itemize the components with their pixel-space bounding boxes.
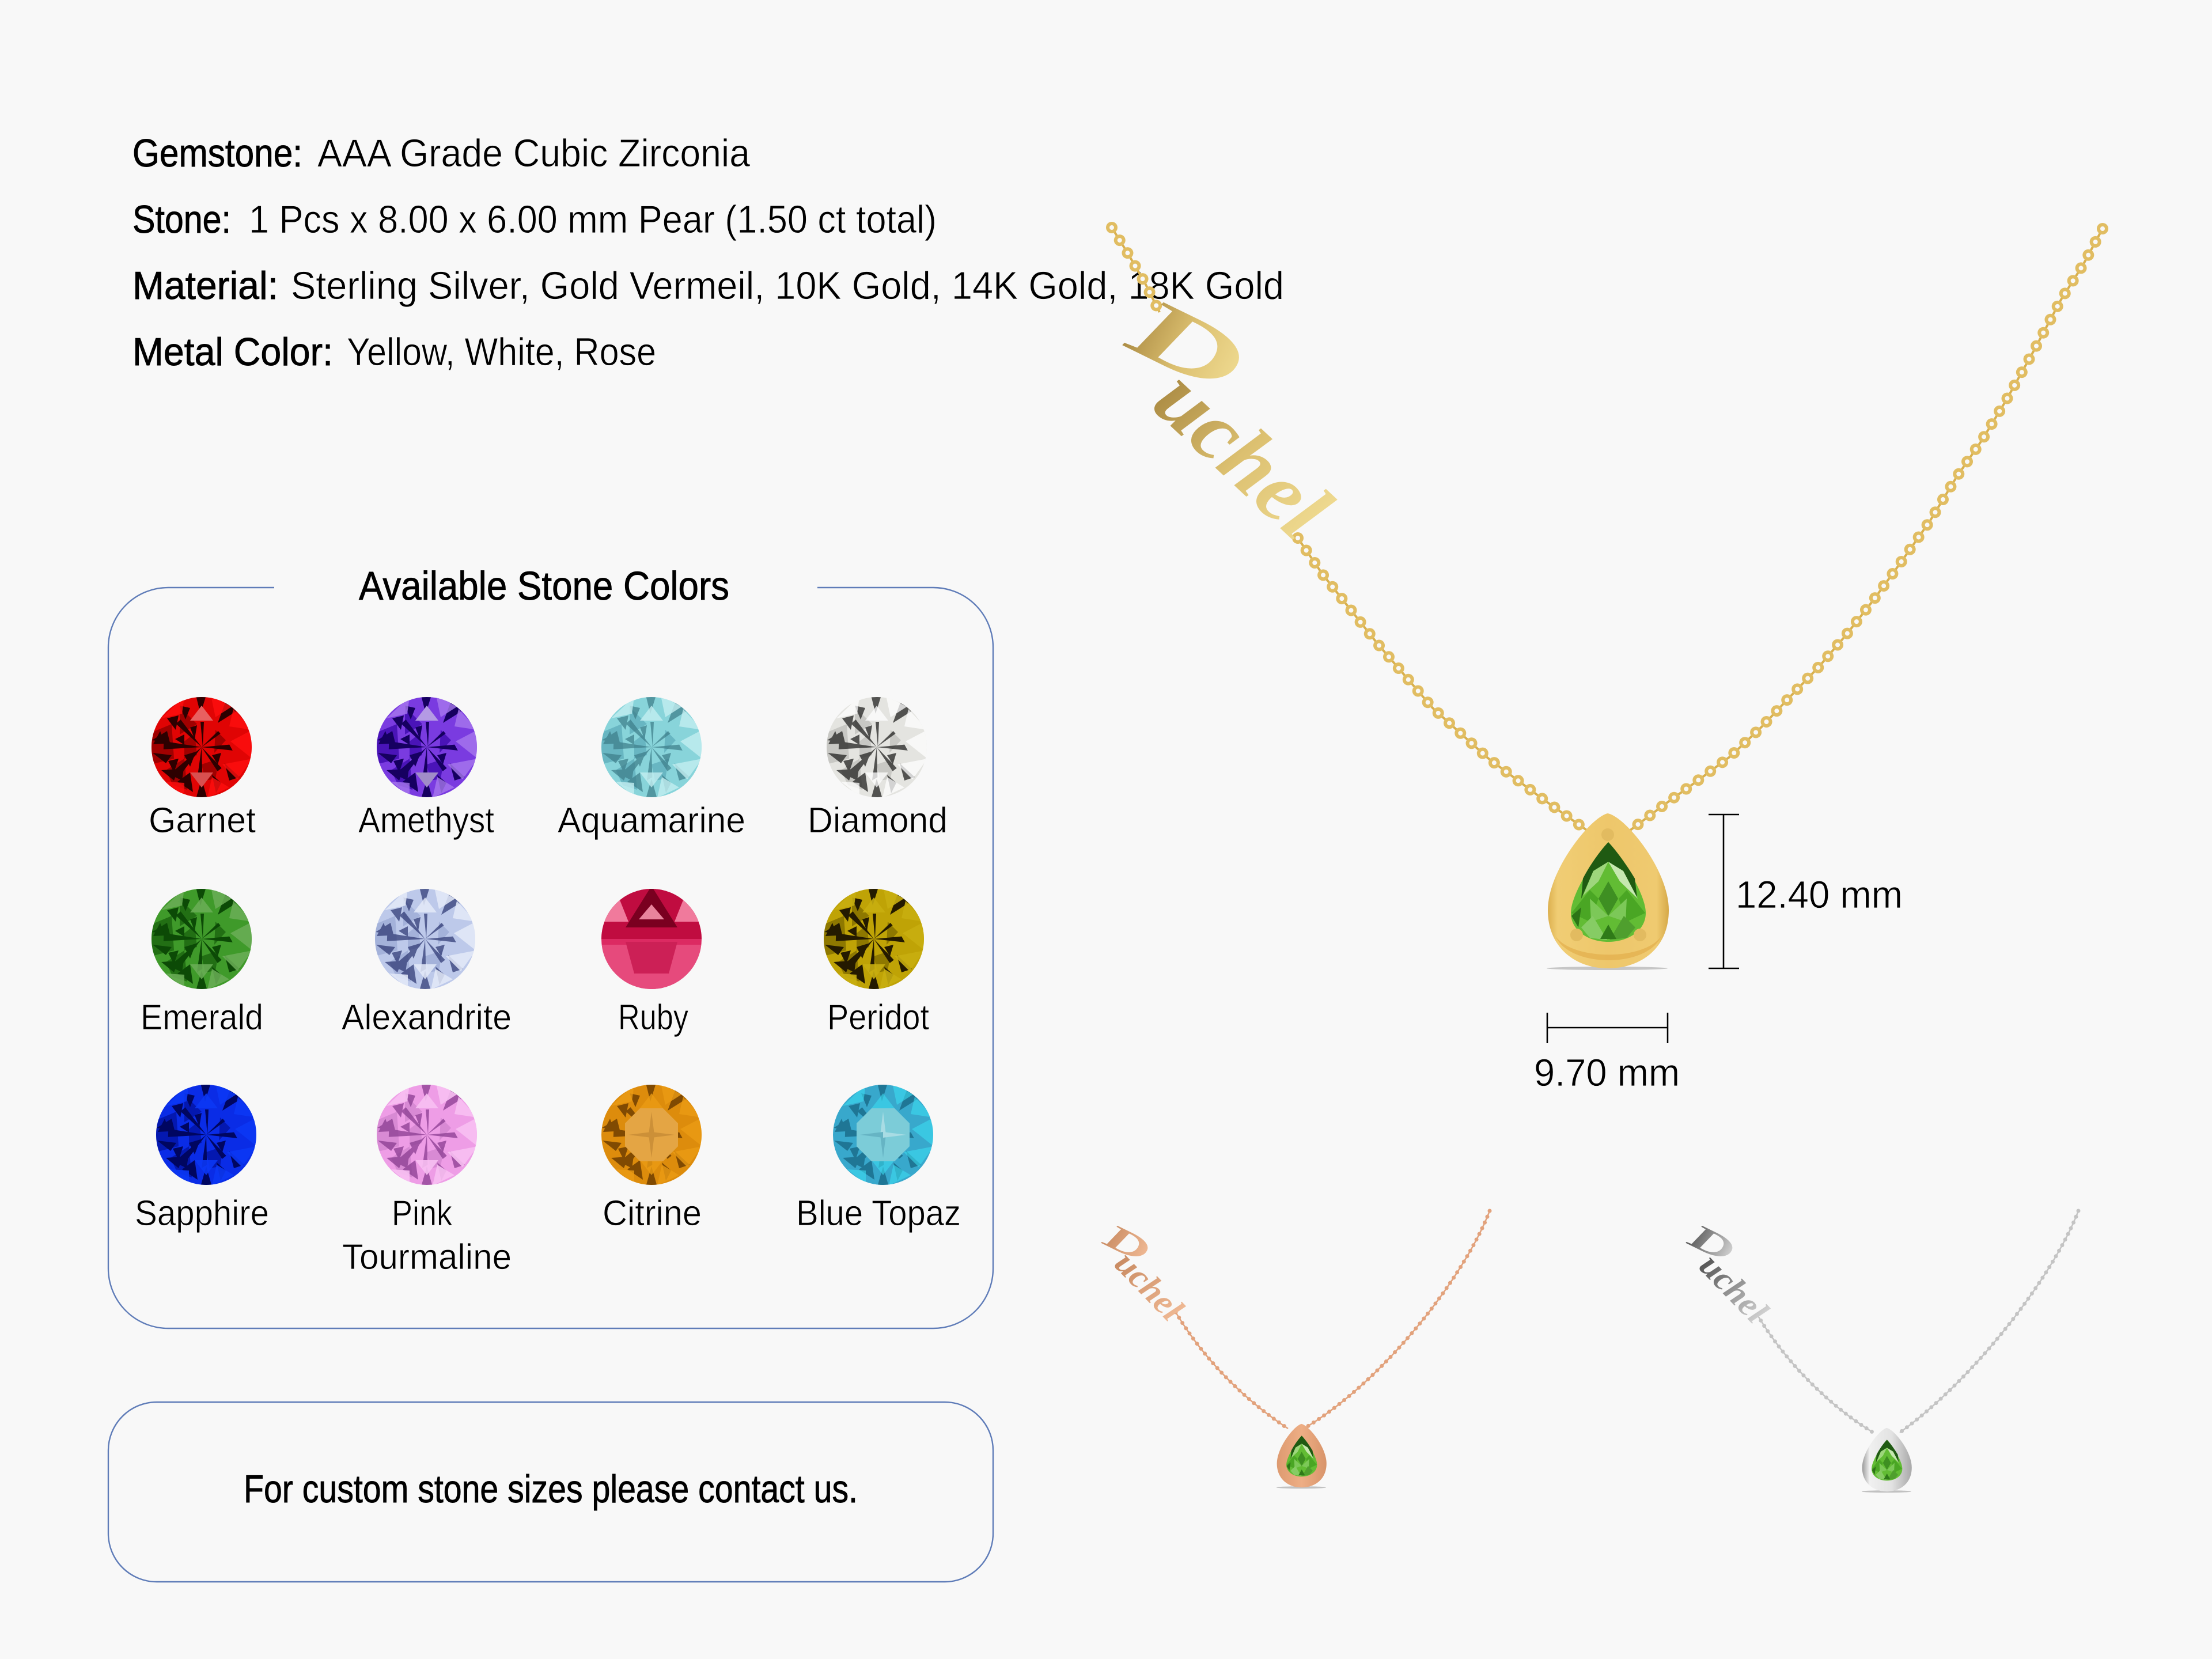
name script: silver: uchel: [1692, 1246, 1776, 1331]
rose gold necklace thumbnail: [1097, 1211, 1490, 1488]
name script: Duchel: uchel: [1136, 350, 1349, 558]
stone labels: Blue Topaz: [796, 1194, 961, 1233]
stone labels: Diamond: [808, 801, 948, 840]
gem: diamond: [826, 695, 927, 799]
gem: aquamarine: [601, 695, 702, 799]
stone labels: Tourmaline: [342, 1237, 512, 1277]
gem: peridot: [823, 887, 925, 991]
stone labels: Amethyst: [358, 801, 494, 840]
gem: amethyst: [376, 695, 478, 799]
name script: silver: D: [1682, 1215, 1741, 1270]
gem: citrine: [601, 1083, 702, 1187]
spec line: gemstone: Gemstone:: [132, 131, 302, 175]
name script: Duchel: [1114, 276, 1349, 558]
rose pendant: [1277, 1424, 1327, 1488]
spec line: material: Sterling Silver, Gold Vermeil, 10K Gold, 14K Gold, 18K Gold: [291, 264, 1284, 308]
stone labels: Pink: [392, 1194, 453, 1233]
main yellow gold necklace: [1112, 228, 2103, 970]
gem: blue topaz: [833, 1083, 934, 1187]
stone labels: Aquamarine: [558, 801, 745, 840]
gem: sapphire: [156, 1083, 257, 1187]
stone labels: Ruby: [618, 998, 688, 1037]
white metal necklace thumbnail: [1682, 1211, 2078, 1493]
stone labels: Alexandrite: [342, 998, 512, 1037]
panel: custom stone sizes note: [108, 1402, 993, 1582]
silver chain: [1758, 1211, 2078, 1433]
stone labels: Citrine: [603, 1194, 702, 1233]
spec line: gemstone: AAA Grade Cubic Zirconia: [317, 131, 750, 175]
gem: garnet: [151, 695, 252, 799]
dimension: height 12.40 mm: [1709, 815, 1903, 968]
name script: rose: [1097, 1215, 1191, 1328]
specifications text block: [132, 131, 1284, 374]
spec line: gemstone: [132, 131, 750, 175]
stone labels: Garnet: [149, 801, 256, 840]
silver pendant: [1862, 1428, 1912, 1493]
spec line: stone: 1 Pcs x 8.00 x 6.00 mm Pear (1.50 ct total): [249, 198, 937, 241]
note text: For custom stone sizes please contact us.: [244, 1467, 858, 1511]
pear pendant: [1547, 813, 1669, 970]
panel: available stone colors: [108, 563, 993, 1328]
infographic canvas: [107, 138, 2108, 1583]
name script: Duchel: D: [1114, 276, 1260, 412]
stone labels: Peridot: [827, 998, 929, 1037]
rose chain: [1176, 1211, 1490, 1429]
gem: emerald: [151, 887, 252, 991]
dimension: height 12.40 mm: 12.40 mm: [1736, 873, 1903, 916]
gem: alexandrite: [374, 887, 476, 991]
spec line: material: Material:: [132, 264, 278, 308]
spec line: metal color: Metal Color:: [132, 330, 333, 374]
dimension: width 9.70 mm: 9.70 mm: [1534, 1051, 1680, 1094]
stone labels: Sapphire: [135, 1194, 269, 1233]
spec line: stone: Stone:: [132, 198, 231, 241]
stone labels: [135, 801, 961, 1277]
gem: ruby: [600, 886, 703, 991]
panel heading: Available Stone Colors: [359, 563, 729, 608]
name script: silver: [1682, 1215, 1776, 1331]
spec line: metal color: [132, 330, 656, 374]
stone labels: Emerald: [141, 998, 263, 1037]
panel outline with heading gap: [108, 588, 993, 1328]
dimension: width 9.70 mm: [1534, 1013, 1680, 1094]
name script: rose: uchel: [1108, 1244, 1191, 1328]
gem: pink tourmaline: [376, 1083, 478, 1187]
name script: rose: D: [1097, 1215, 1156, 1270]
spec line: metal color: Yellow, White, Rose: [347, 330, 656, 374]
gold chain: [1112, 228, 2103, 832]
